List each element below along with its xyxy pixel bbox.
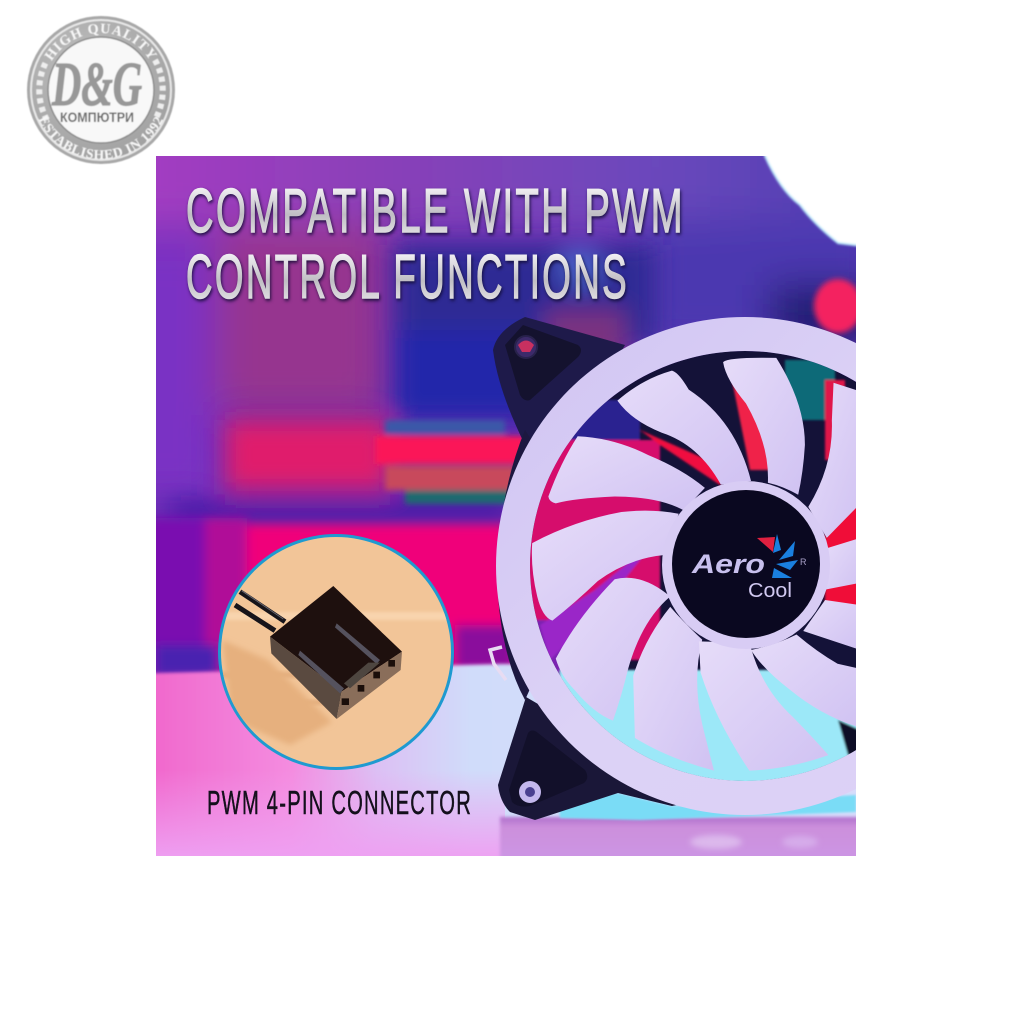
background: bright window patch — [765, 150, 862, 246]
title — [186, 188, 683, 304]
fan hub with AeroCool logo: Cool — [748, 580, 792, 602]
logo: D&G Kompyutri seal: КОМПЮТРИ — [60, 110, 134, 125]
connector wires — [235, 591, 285, 631]
logo: D&G Kompyutri seal: HIGH QUALITY — [44, 23, 158, 62]
fan frame corners — [490, 317, 856, 820]
fan hub with AeroCool logo: Aero — [691, 549, 765, 579]
logo: D&G Kompyutri seal — [26, 16, 176, 164]
logo: D&G Kompyutri seal: ESTABLISHED IN 1992 — [38, 116, 164, 160]
logo: D&G Kompyutri seal: D&G — [51, 51, 142, 119]
fan hub with AeroCool logo: R — [800, 557, 807, 567]
connector label: PWM 4-PIN CONNECTOR — [207, 784, 472, 821]
fan interior behind blades — [530, 351, 856, 781]
fan outer ring — [496, 317, 856, 815]
title: COMPATIBLE WITH PWM — [186, 177, 685, 246]
fan blades — [532, 358, 860, 771]
panel: product photo — [156, 156, 856, 856]
fan hub with AeroCool logo — [662, 481, 830, 649]
title: CONTROL FUNCTIONS — [186, 243, 629, 312]
connector inset circle — [220, 536, 452, 768]
connector plug — [270, 586, 402, 719]
background: blurred room scene — [156, 156, 856, 856]
fan — [488, 317, 856, 822]
